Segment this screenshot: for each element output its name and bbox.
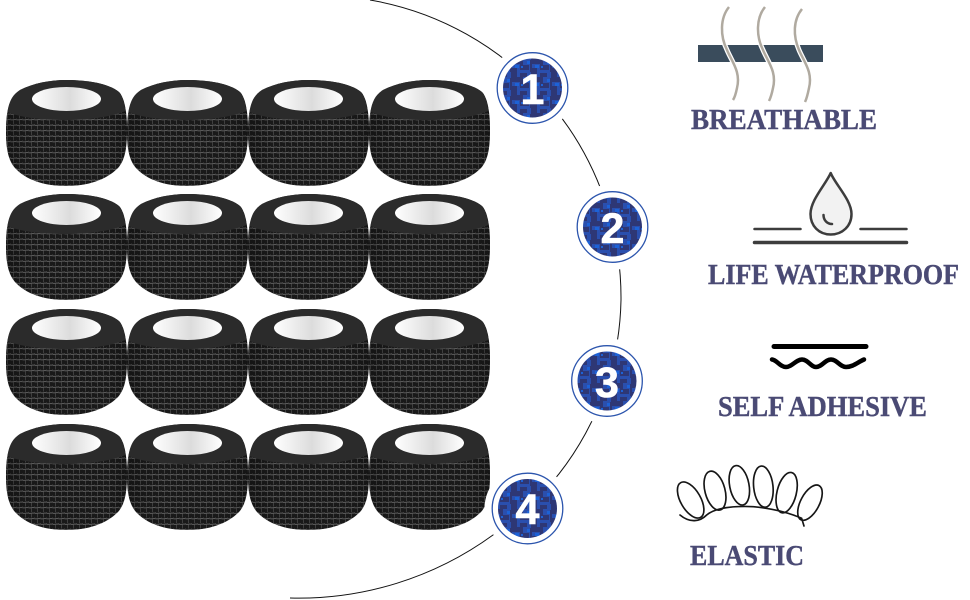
roll row 1 column 4 (369, 80, 490, 186)
icon: elastic coil spring (672, 464, 827, 526)
roll row 2 column 3 (248, 194, 369, 300)
label: breathable: BREATHABLE (691, 104, 877, 136)
badge 4 (484, 466, 570, 552)
label: elastic: ELASTIC (690, 541, 804, 572)
label: self adhesive: SELF ADHESIVE (718, 392, 927, 423)
icon: breathable fabric (698, 7, 823, 102)
roll row 4 column 1 (6, 424, 127, 530)
badge 2: 2 (601, 205, 624, 253)
badge 1: 1 (521, 66, 544, 114)
roll row 1 column 3 (248, 80, 369, 186)
roll row 2 column 4 (369, 194, 490, 300)
icon: self adhesive layers (772, 346, 866, 367)
badge 4: 4 (516, 486, 540, 534)
badge 3 (564, 338, 650, 424)
roll row 4 column 4 (369, 424, 490, 530)
badge 2 (570, 184, 656, 270)
badge 3: 3 (595, 359, 619, 407)
roll row 3 column 2 (127, 309, 248, 415)
roll row 1 column 2 (127, 80, 248, 186)
grid of black bandage rolls (6, 80, 490, 530)
icon: water drop on surface (754, 173, 906, 242)
roll row 2 column 2 (127, 194, 248, 300)
badge 1 (490, 45, 576, 131)
roll row 3 column 4 (369, 309, 490, 415)
roll row 1 column 1 (6, 80, 127, 186)
roll row 4 column 2 (127, 424, 248, 530)
roll row 3 column 3 (248, 309, 369, 415)
roll row 4 column 3 (248, 424, 369, 530)
roll row 3 column 1 (6, 309, 127, 415)
connecting arc (290, 0, 621, 598)
roll row 2 column 1 (6, 194, 127, 300)
